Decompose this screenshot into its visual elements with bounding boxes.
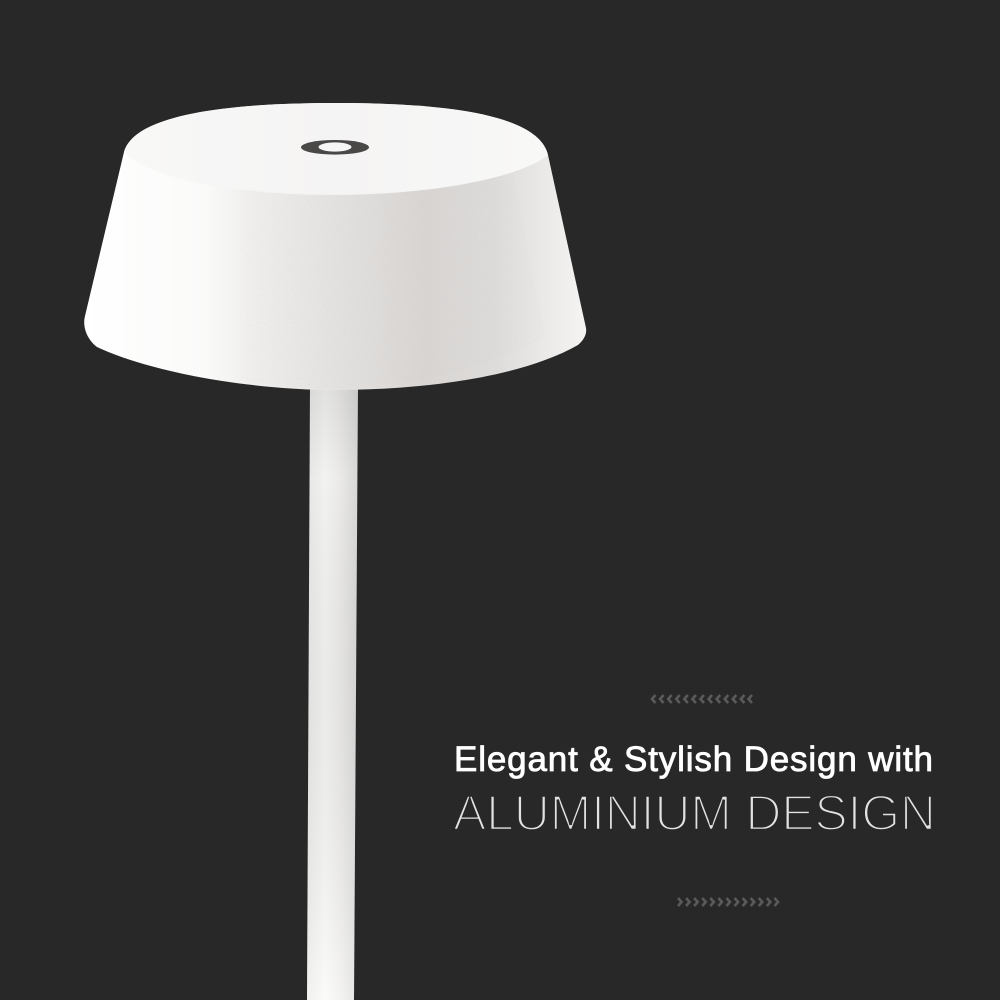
heading: aluminium design: ALUMINIUM DESIGN bbox=[453, 785, 936, 841]
bottom chevron row bbox=[678, 898, 778, 906]
shade texture bbox=[240, 173, 545, 388]
touch switch ring bbox=[301, 140, 369, 155]
top chevron row bbox=[652, 695, 752, 703]
lamp shade bbox=[84, 103, 586, 390]
shade top face bbox=[124, 103, 548, 195]
lamp pole bbox=[307, 385, 358, 1000]
heading: elegant and stylish: Elegant & Stylish Design with bbox=[454, 740, 933, 779]
shade side wall bbox=[84, 103, 586, 390]
